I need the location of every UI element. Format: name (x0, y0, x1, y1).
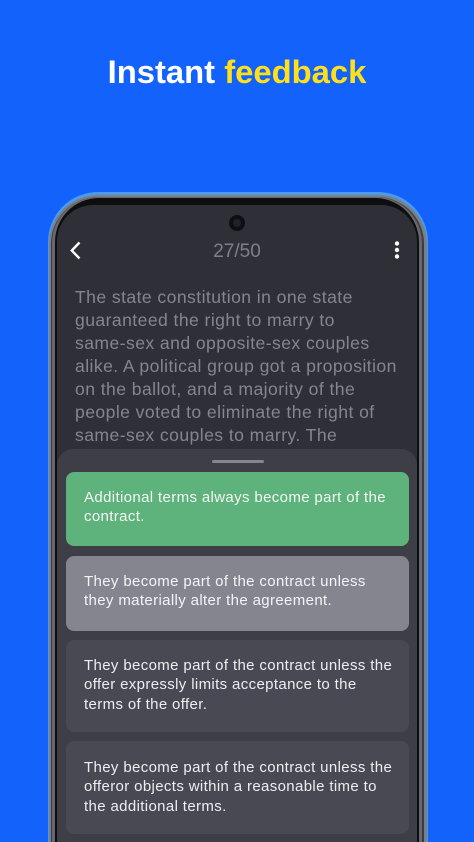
answer card: option three: offer expressly limits acceptance to the (84, 676, 357, 693)
phone bezel (55, 198, 419, 842)
question text (75, 287, 397, 445)
title: Instant feedback (108, 53, 366, 90)
question text: same-sex couples to marry. The (75, 425, 337, 445)
phone frame shadow line (51, 197, 424, 842)
question text: The state constitution in one state (75, 287, 353, 307)
answer card: neutral highlighted: They become part of the contract unless (84, 573, 366, 590)
answer card: option four: offeror objects within a reasonable time to (84, 778, 377, 795)
answer card: selected correct: Additional terms always become part of the (84, 489, 386, 506)
phone metal frame (49, 195, 427, 842)
phone blue edge (48, 192, 428, 842)
answer sheet (57, 449, 417, 842)
answer card: option three (66, 640, 409, 732)
sheet drag handle (212, 460, 264, 463)
icon: front camera (229, 215, 245, 231)
question text: alike. A political group got a proposition (75, 356, 397, 376)
question text: on the ballot, and a majority of the (75, 379, 355, 399)
question text: people voted to eliminate the right of (75, 402, 375, 422)
phone screen (57, 205, 417, 842)
answer card: option four: They become part of the contract unless the (84, 759, 392, 776)
answer card: option four (66, 741, 409, 834)
answer card: neutral highlighted: they materially alter the agreement. (84, 592, 332, 609)
answer card: option three: terms of the offer. (84, 696, 207, 713)
phone mockup (48, 192, 428, 842)
question text: guaranteed the right to marry to (75, 310, 335, 330)
answer card: option four: the additional terms. (84, 798, 227, 815)
phone frame inner line (52, 197, 422, 842)
answer card: selected correct (66, 472, 409, 546)
answer card: neutral highlighted (66, 556, 409, 631)
icon: more menu (394, 241, 400, 259)
answer card: option three: They become part of the contract unless the (84, 657, 392, 674)
question text: same-sex and opposite-sex couples (75, 333, 370, 353)
answer card: selected correct: contract. (84, 508, 145, 525)
question counter: 27/50 (213, 241, 261, 262)
icon: back arrow (70, 242, 80, 260)
